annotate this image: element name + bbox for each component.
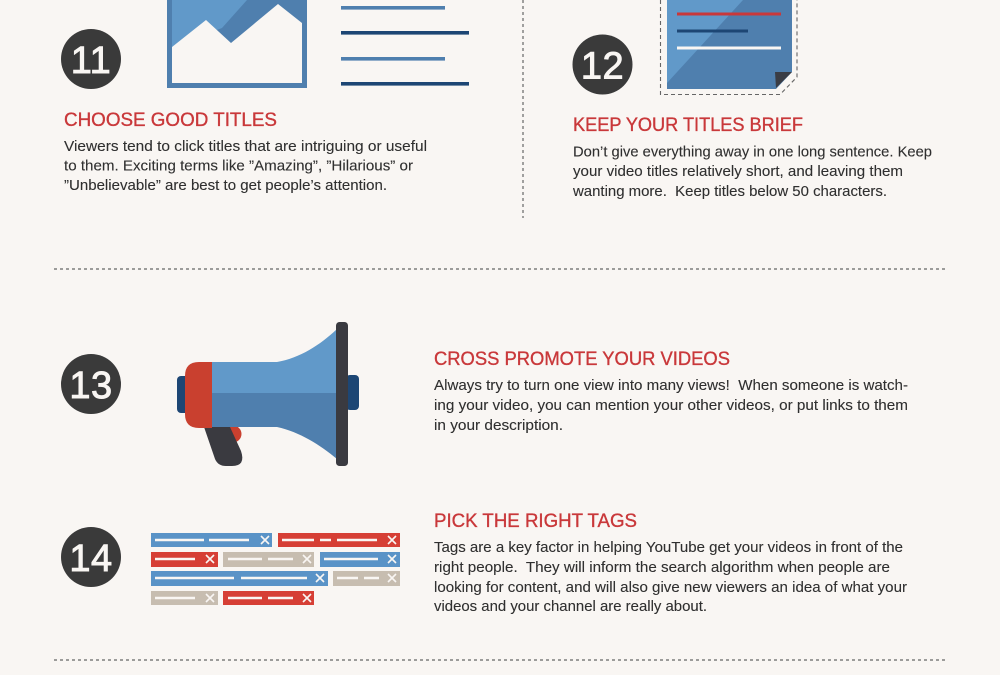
heading: pick the right tags: PICK THE RIGHT TAGS (434, 511, 637, 532)
badge: number 11 (61, 29, 121, 89)
badge: number 14: 14 (69, 538, 113, 580)
text block: tip 11 body: ”Unbelievable” are best to get people’s attention. (64, 178, 387, 194)
badge: number 12 (572, 34, 632, 94)
text block: tip 12 body: wanting more. Keep titles below 50 characters. (572, 184, 887, 200)
text block: tip 14 body: looking for content, and will also give new viewers an idea of what your (434, 580, 907, 596)
text block: tip 12 body (572, 144, 932, 200)
panel: tip 12 (572, 0, 932, 200)
badge: number 12: 12 (581, 46, 624, 88)
badge: number 11: 11 (71, 40, 111, 82)
text block: tip 11 body: Viewers tend to click titles that are intriguing or useful (64, 139, 427, 155)
icon: text lines (341, 6, 469, 86)
icon: sticky note (660, 0, 797, 94)
heading: cross promote your videos: CROSS PROMOTE YOUR VIDEOS (434, 349, 730, 370)
text block: tip 11 body (64, 139, 427, 194)
heading: keep your titles brief: KEEP YOUR TITLES BRIEF (573, 115, 803, 136)
panel: tip 13 (61, 322, 908, 466)
badge: number 13: 13 (69, 365, 113, 407)
text block: tip 13 body: in your description. (434, 418, 563, 434)
text block: tip 12 body: your video titles relatively short, and leaving them (573, 164, 903, 180)
text block: tip 11 body: to them. Exciting terms like ”Amazing”, ”Hilarious” or (64, 158, 413, 174)
text block: tip 13 body (434, 378, 908, 434)
heading: choose good titles: CHOOSE GOOD TITLES (64, 110, 277, 131)
panel: tip 11 (61, 0, 469, 194)
panel: tip 14 (61, 511, 907, 615)
text block: tip 14 body: right people. They will inform the search algorithm when people are (434, 560, 890, 576)
badge: number 13 (61, 354, 121, 414)
text block: tip 12 body: Don’t give everything away in one long sentence. Keep (573, 144, 932, 160)
text block: tip 14 body: videos and your channel are really about. (434, 599, 707, 615)
text block: tip 14 body (434, 540, 907, 615)
icon: image thumbnail (167, 0, 307, 88)
badge: number 14 (61, 527, 121, 587)
text block: tip 13 body: ing your video, you can mention your other videos, or put links to them (434, 398, 908, 414)
icon: megaphone (177, 322, 359, 466)
text block: tip 14 body: Tags are a key factor in helping YouTube get your videos in front of the (434, 540, 903, 556)
text block: tip 13 body: Always try to turn one view into many views! When someone is watch- (434, 378, 908, 394)
icon: tag cloud (151, 533, 400, 605)
